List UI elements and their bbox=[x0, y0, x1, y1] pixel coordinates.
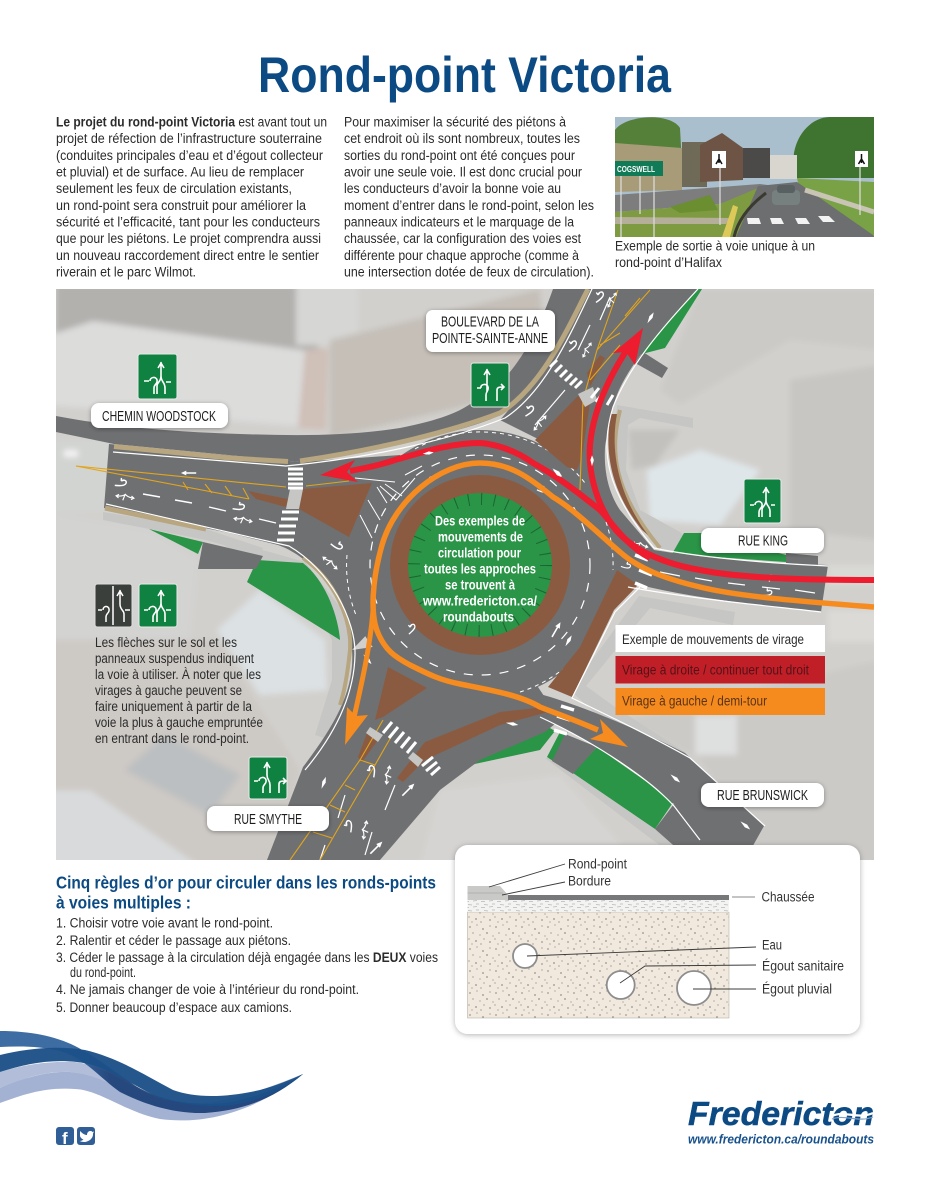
sign: Boulevard de la Pointe-Sainte-Anne bbox=[471, 363, 509, 407]
central island text: Des exemples de bbox=[435, 514, 525, 528]
icon: Twitter bbox=[77, 1127, 95, 1145]
text block: pedestrian safety: une intersection dotée de feux de circulation). bbox=[344, 264, 594, 280]
legend: turning movements: Exemple de mouvements de virage bbox=[622, 632, 804, 647]
diagram labels bbox=[568, 856, 844, 996]
lane arrows bbox=[115, 290, 780, 855]
list: five golden rules bbox=[56, 916, 438, 1015]
heading: five golden rules: à voies multiples : bbox=[56, 892, 191, 912]
list: five golden rules: du rond-point. bbox=[70, 965, 136, 980]
text block: project introduction: que pour les piétons. Le projet comprendra aussi bbox=[56, 231, 321, 246]
label: Boulevard de la Pointe-Sainte-Anne: POINTE-SAINTE-ANNE bbox=[432, 331, 548, 347]
sign: Rue Smythe bbox=[249, 757, 287, 799]
pipes bbox=[513, 944, 711, 1005]
text block: lane guidance: panneaux suspendus indiquent bbox=[95, 651, 254, 666]
central island text: circulation pour bbox=[438, 546, 522, 560]
icon: Facebook: f bbox=[62, 1129, 68, 1148]
aerial background bbox=[50, 283, 880, 866]
text block: lane guidance: la voie à utiliser. À noter que les bbox=[95, 667, 261, 682]
decorative waves bbox=[0, 1031, 303, 1120]
diagram labels: Chaussée bbox=[762, 890, 814, 904]
text block: project introduction: (conduites principales d’eau et d’égout collecteur bbox=[56, 148, 323, 163]
green spaces bbox=[149, 289, 786, 829]
central island text: se trouvent à bbox=[445, 578, 515, 592]
label: Rue King: RUE KING bbox=[738, 534, 788, 550]
text block: lane guidance bbox=[95, 635, 263, 746]
text block: pedestrian safety: différente pour chaque approche (comme à bbox=[344, 248, 579, 263]
list: five golden rules: 1. Choisir votre voie avant le rond-point. bbox=[56, 916, 273, 930]
text block: project introduction: un rond-point sera construit pour améliorer la bbox=[56, 198, 307, 213]
sidewalks bbox=[103, 405, 735, 860]
central island text: www.fredericton.ca/ bbox=[422, 594, 537, 608]
diagram labels: Bordure bbox=[568, 874, 611, 888]
text block: pedestrian safety: panneaux indicateurs et le marquage de la bbox=[344, 214, 575, 230]
yellow lane lines bbox=[76, 290, 650, 860]
list: five golden rules: 3. Céder le passage à la circulation déjà engagée dans les DEUX voies bbox=[56, 950, 438, 965]
central island text: mouvements de bbox=[438, 530, 523, 544]
text block: lane guidance: Les flèches sur le sol et les bbox=[95, 635, 237, 650]
list: five golden rules: 4. Ne jamais changer de voie à l’intérieur du rond-point. bbox=[56, 982, 359, 997]
logo: Fredericton: www.fredericton.ca/roundabouts bbox=[688, 1132, 874, 1146]
text block: lane guidance: voie la plus à gauche empruntée bbox=[95, 715, 263, 730]
text block: project introduction: et pluvial) et de surface. Au lieu de remplacer bbox=[56, 164, 304, 180]
arrow: red right-turn and straight route bbox=[320, 328, 874, 580]
text block: pedestrian safety: sorties du rond-point ont été conçues pour bbox=[344, 148, 575, 163]
photo: single-lane exit in Halifax bbox=[615, 117, 874, 237]
label: Rue Smythe: RUE SMYTHE bbox=[234, 812, 302, 828]
aggregate layer bbox=[468, 900, 729, 912]
text block: lane guidance: faire uniquement à partir de la bbox=[95, 699, 252, 714]
text block: pedestrian safety: cet endroit où ils sont nombreux, toutes les bbox=[344, 131, 580, 146]
central island text bbox=[422, 514, 537, 624]
photo caption bbox=[615, 238, 815, 270]
splitter islands bbox=[248, 355, 648, 782]
label: Rue Brunswick: RUE BRUNSWICK bbox=[717, 788, 808, 804]
label: Chemin Woodstock: CHEMIN WOODSTOCK bbox=[102, 409, 216, 425]
label: Boulevard de la Pointe-Sainte-Anne: BOULEVARD DE LA bbox=[441, 314, 539, 330]
signs: overhead and lane signs bbox=[95, 584, 177, 627]
text block: pedestrian safety bbox=[344, 114, 594, 280]
curb and roundabout apron bbox=[468, 886, 508, 900]
legend: turning movements: Virage à gauche / demi-tour bbox=[622, 694, 767, 708]
text block: project introduction: riverain et le parc Wilmot. bbox=[56, 264, 196, 280]
list: five golden rules: 5. Donner beaucoup d’espace aux camions. bbox=[56, 1000, 292, 1015]
sign: Rue King bbox=[744, 479, 781, 523]
heading: five golden rules bbox=[56, 872, 436, 912]
label: Rue King bbox=[701, 528, 824, 553]
soil layer bbox=[468, 912, 729, 1018]
ring entry lines bbox=[347, 432, 613, 692]
text block: lane guidance: virages à gauche peuvent se bbox=[95, 683, 242, 698]
label: Rue Brunswick bbox=[701, 783, 824, 807]
panel: roundabout plan map bbox=[50, 283, 880, 866]
text block: project introduction bbox=[56, 114, 327, 280]
text block: pedestrian safety: moment d’entrer dans le rond-point, selon les bbox=[344, 198, 594, 213]
diagram labels: Eau bbox=[762, 938, 782, 952]
diagram labels: Égout sanitaire bbox=[762, 958, 844, 974]
photo caption: rond-point d’Halifax bbox=[615, 255, 722, 270]
photo: single-lane exit in Halifax: COGSWELL bbox=[617, 165, 655, 174]
title: Rond-point Victoria bbox=[258, 47, 672, 103]
text block: project introduction: Le projet du rond-point Victoria est avant tout un bbox=[56, 114, 327, 130]
text block: pedestrian safety: Pour maximiser la sécurité des piétons à bbox=[344, 114, 567, 130]
panel: road cross-section diagram bbox=[455, 845, 860, 1034]
central island bbox=[390, 475, 570, 655]
text block: lane guidance: en entrant dans le rond-point. bbox=[95, 731, 249, 746]
heading: five golden rules: Cinq règles d’or pour circuler dans les ronds-points bbox=[56, 872, 436, 892]
photo caption: Exemple de sortie à voie unique à un bbox=[615, 238, 815, 254]
crosswalks bbox=[277, 360, 652, 775]
text block: pedestrian safety: les conducteurs d’avoir la bonne voie au bbox=[344, 181, 561, 196]
logo: Fredericton: Fredericton bbox=[688, 1095, 874, 1132]
text block: pedestrian safety: avoir une seule voie. Il est donc crucial pour bbox=[344, 164, 582, 180]
road markings bbox=[106, 289, 828, 860]
text block: project introduction: sécurité et l’efficacité, tant pour les conducteurs bbox=[56, 214, 320, 230]
diagram labels: Rond-point bbox=[568, 856, 627, 872]
text block: pedestrian safety: chaussée, car la configuration des voies est bbox=[344, 231, 581, 246]
sign: Chemin Woodstock bbox=[138, 354, 177, 399]
leader lines bbox=[489, 864, 756, 989]
text block: project introduction: seulement les feux de circulation existants, bbox=[56, 181, 292, 196]
arrow: orange left-turn and U-turn route bbox=[345, 463, 874, 747]
text block: project introduction: projet de réfection de l’infrastructure souterraine bbox=[56, 131, 322, 146]
legend: turning movements bbox=[616, 625, 825, 715]
icon: Facebook bbox=[56, 1127, 74, 1148]
text block: project introduction: un nouveau raccordement direct entre le sentier bbox=[56, 248, 319, 263]
pavement layer bbox=[508, 895, 729, 900]
curb strips bbox=[105, 289, 660, 705]
central island text: roundabouts bbox=[443, 610, 514, 624]
label: Chemin Woodstock bbox=[91, 403, 228, 428]
legend: turning movements: Virage à droite / continuer tout droit bbox=[622, 662, 809, 678]
diagram labels: Égout pluvial bbox=[762, 982, 832, 996]
list: five golden rules: 2. Ralentir et céder le passage aux piétons. bbox=[56, 933, 291, 948]
road surfaces bbox=[56, 289, 828, 860]
central island text: toutes les approches bbox=[424, 562, 536, 576]
label: Rue Smythe bbox=[207, 806, 329, 831]
label: Boulevard de la Pointe-Sainte-Anne bbox=[426, 310, 555, 352]
